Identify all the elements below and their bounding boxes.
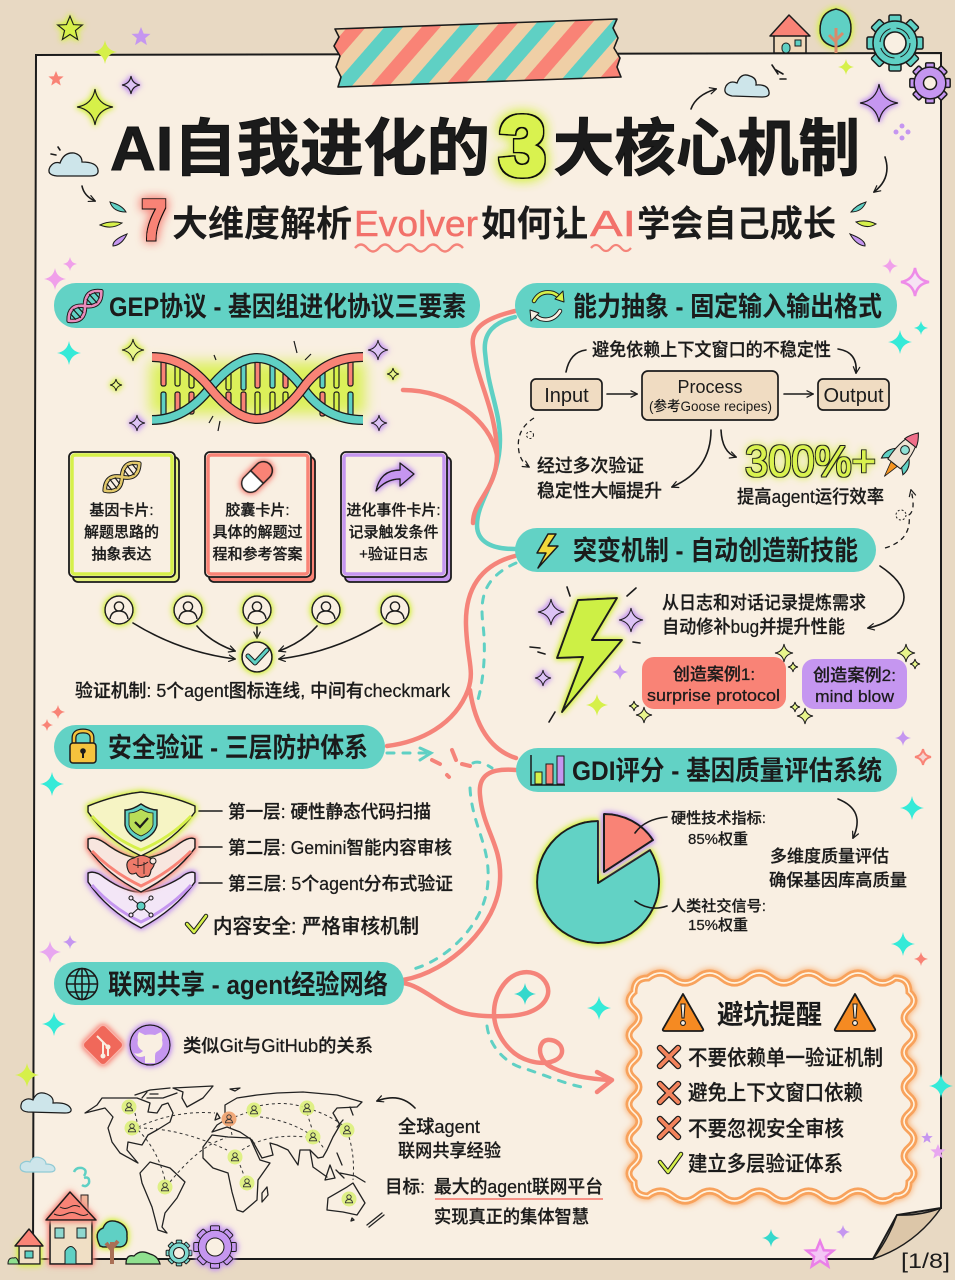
warning list: 不要忽视安全审核 [688, 1118, 844, 1141]
icon: network nodes [129, 896, 153, 917]
flow diagram: input process output: Process [677, 377, 743, 397]
note: stability: 稳定性大幅提升 [537, 481, 662, 501]
highlighted numeral 3: 3 [499, 99, 546, 193]
note: goal: 实现真正的集体智慧 [434, 1207, 589, 1227]
subtitle: 大维度解析 [172, 203, 352, 244]
note: goal: 最大的agent联网平台 [434, 1177, 603, 1197]
connector curves between sections [387, 311, 612, 1092]
panel: mutation mechanism [515, 528, 920, 724]
card: evolution event card [341, 452, 451, 582]
badge: case 1: 创造案例1: [673, 665, 755, 684]
icon: brain [127, 856, 156, 877]
flow diagram: input process output: (参考Goose recipes) [649, 398, 772, 414]
dashed loop arrow to rocket [885, 490, 913, 548]
title: AI自我进化的 [110, 115, 490, 184]
warning list: 建立多层验证体系 [688, 1153, 843, 1176]
layered shield diagram [88, 792, 195, 928]
warning list [660, 1047, 883, 1176]
badge: case 1 [642, 657, 786, 709]
card: capsule card: 具体的解题过 [212, 524, 303, 541]
panel: capability abstraction [515, 283, 929, 548]
DNA helix illustration [110, 339, 399, 431]
badge: case 2: 创造案例2: [813, 666, 896, 685]
card: gene card: 抽象表达 [91, 545, 152, 563]
card: gene card: 基因卡片: [89, 502, 154, 519]
agent verification network [105, 596, 409, 672]
note: global agents: 联网共享经验 [398, 1141, 501, 1161]
title [110, 99, 860, 193]
heading: security [54, 725, 385, 769]
subtitle [100, 188, 876, 252]
subtitle: AI [590, 203, 636, 244]
note: global agents: 全球agent [398, 1116, 480, 1137]
heading: mutation: 突变机制 - 自动创造新技能 [573, 536, 858, 566]
text: git vs github: 类似Git与GitHub的关系 [183, 1036, 373, 1056]
card: gene card: 解题思路的 [84, 524, 159, 541]
note: goal [385, 1177, 603, 1227]
panel: pitfall warning [629, 973, 914, 1201]
page curl [873, 1208, 941, 1259]
note: goal: 目标: [385, 1177, 425, 1197]
panel: networked sharing [54, 962, 603, 1233]
warning icons and title [663, 994, 875, 1031]
icon: git and github [82, 1024, 170, 1066]
heading: network [54, 962, 404, 1005]
layer labels: 第三层: 5个agent分布式验证 [228, 874, 453, 894]
badge: case 2: mind blow [815, 687, 895, 706]
card: capsule card: 胶囊卡片: [225, 502, 290, 519]
badge: case 2 [802, 659, 907, 709]
content safety note: 内容安全: 严格审核机制 [213, 915, 419, 938]
panel: GEP protocol [54, 283, 480, 701]
pie labels: 85%权重 [688, 831, 748, 848]
note: auto patching: 自动修补bug并提升性能 [662, 617, 845, 637]
note: avoid context instability: 避免依赖上下文窗口的不稳定性 [592, 340, 831, 360]
note: global agents [377, 1098, 501, 1161]
layer labels: 第二层: Gemini智能内容审核 [228, 837, 452, 858]
wavy neon frame [629, 973, 914, 1201]
card: evolution event card: 记录触发条件 [348, 524, 439, 541]
arrows from process [518, 418, 736, 487]
highlighted numeral 7: 7 [142, 188, 166, 251]
note: auto patching [662, 566, 904, 637]
note: multi-dimensional assessment [769, 799, 907, 890]
pie labels: 人类社交信号: [671, 897, 766, 915]
layer labels [199, 802, 453, 894]
heading: GEP: GEP协议 - 基因组进化协议三要素 [109, 292, 466, 322]
verification caption: 验证机制: 5个agent图标连线, 中间有checkmark [75, 681, 451, 701]
card: capsule card [205, 452, 315, 582]
icon: lightning bolt [530, 587, 643, 722]
title: 大核心机制 [553, 115, 860, 184]
heading: security: 安全验证 - 三层防护体系 [108, 733, 368, 763]
stat caption: 提高agent运行效率 [737, 487, 884, 507]
subtitle: Evolver [354, 203, 478, 244]
card: capsule card: 程和参考答案 [212, 545, 303, 563]
note: multi-dimensional assessment: 多维度质量评估 [770, 847, 889, 866]
decoration: top sparkles and stars [48, 16, 910, 140]
warning icons and title: 避坑提醒 [717, 1000, 822, 1030]
heading: GDI: GDI评分 - 基因质量评估系统 [572, 756, 882, 786]
flow diagram: input process output: Input [544, 385, 589, 407]
pie labels [671, 810, 766, 934]
warning list: 避免上下文窗口依赖 [688, 1082, 863, 1105]
heading: GEP [54, 283, 480, 328]
layer labels: 第一层: 硬性静态代码扫描 [228, 802, 431, 822]
icon: rocket [873, 424, 929, 485]
note: stability [537, 456, 662, 501]
warning list: 不要依赖单一验证机制 [688, 1047, 883, 1070]
decoration: clouds with small arrows [49, 65, 887, 201]
heading: network: 联网共享 - agent经验网络 [108, 970, 388, 1000]
card: evolution event card: 进化事件卡片: [346, 502, 441, 519]
subtitle: 学会自己成长 [637, 203, 836, 244]
heading: GDI [516, 748, 897, 792]
panel: security verification [54, 725, 453, 938]
card: gene card [69, 452, 179, 582]
pie labels: 15%权重 [688, 917, 748, 934]
pie chart [537, 814, 667, 943]
decoration: top right house, tree and gears [770, 9, 950, 103]
decoration: bottom left village [8, 1093, 236, 1268]
pie labels: 硬性技术指标: [671, 810, 766, 827]
stat: 300%+: 300%+ [745, 437, 876, 486]
flow diagram: input process output [531, 349, 889, 420]
sparkles around badges [629, 644, 920, 724]
icon: shield with check [125, 804, 157, 841]
note: stability: 经过多次验证 [537, 456, 644, 476]
page number: [1/8] [901, 1250, 950, 1273]
badge: case 1: surprise protocol [647, 686, 780, 705]
subtitle: 如何让 [481, 203, 588, 244]
washi tape [334, 19, 621, 87]
heading: capability: 能力抽象 - 固定输入输出格式 [573, 292, 882, 322]
heading: capability [515, 283, 897, 328]
card: evolution event card: +验证日志 [359, 545, 428, 563]
world map [85, 1086, 384, 1233]
panel: GDI score [516, 748, 907, 943]
flow diagram: input process output: Output [823, 385, 884, 407]
side sparkles [15, 257, 953, 1266]
note: multi-dimensional assessment: 确保基因库高质量 [769, 871, 907, 890]
note: auto patching: 从日志和对话记录提炼需求 [662, 593, 866, 613]
heading: mutation [515, 528, 876, 572]
